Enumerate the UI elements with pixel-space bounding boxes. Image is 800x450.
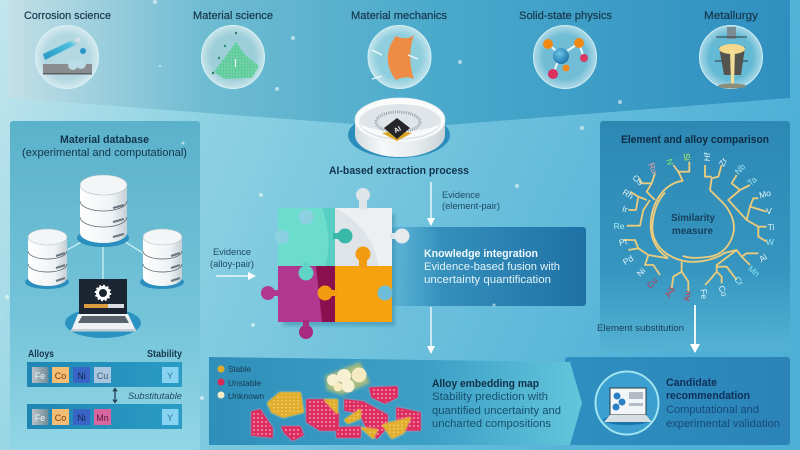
text: alloy embedding map: Stability prediction with [432,391,548,403]
puzzle piece: teal [275,208,352,266]
label: evidence element-pair [442,190,500,211]
discipline: corrosion science [24,10,111,88]
discipline: corrosion science: Corrosion science [24,10,111,22]
alloy row 1: Co [55,371,66,381]
text: candidate recommendation: Candidate [666,377,717,389]
element labels: Pd [621,253,635,267]
label: element substitution: Element substitution [597,323,684,334]
text: candidate recommendation: Computational and [666,404,759,416]
text: alloy embedding map: uncharted compositions [432,418,552,430]
legend: Unknown [228,391,264,401]
label: evidence element-pair: Evidence [442,190,480,200]
element labels: N [664,158,676,166]
element labels: Cu [645,275,659,290]
element labels: Si [682,153,692,161]
heading: element and alloy comparison: Element and alloy comparison [621,134,769,146]
center label: similarity measure: Similarity [671,212,715,224]
icon: petri dish with AI chip [348,98,450,158]
text: alloy embedding map: quantified uncertainty and [432,405,561,417]
arrow: evidence element-pair [427,182,435,226]
element labels: Ru [646,161,660,175]
panel: knowledge integration: uncertainty quantification [424,274,551,286]
element labels: Os [631,173,645,187]
icon: laptop with gear [65,279,141,338]
alloy row 2 [27,404,182,429]
alloy row 1: Fe [35,371,45,381]
icon: central database [77,175,129,247]
puzzle shadow [283,214,395,326]
substitutable marker [113,388,182,402]
panel: knowledge integration [380,227,586,306]
puzzle piece: magenta [261,262,335,339]
element labels: Ta [745,174,759,188]
element labels: Mo [758,188,772,200]
discipline: material mechanics: Material mechanics [351,10,447,22]
discipline: solid-state physics: Solid-state physics [519,10,612,22]
puzzle graphic [261,188,410,339]
alloy row 2: Fe [35,413,45,423]
dendrogram branches [623,162,767,292]
element labels: Mn [746,263,762,279]
element labels: Al [757,252,769,264]
element labels: Pt [618,236,629,248]
alloy row 2: Mn [96,413,109,423]
cluster: unknown [325,362,370,395]
element labels: Ni [635,266,647,278]
element labels: Ti [768,222,774,232]
icon: petri dish with AI chip: AI [393,125,403,135]
label: evidence element-pair: (element-pair) [442,201,500,211]
element labels: Zr [717,156,729,168]
connector lines [67,240,143,280]
alloy row 1: Cu [97,371,108,381]
text: alloy embedding map: Alloy embedding map [432,378,539,390]
element labels: Re [614,221,625,231]
label: evidence alloy-pair: (alloy-pair) [210,259,254,269]
text: candidate recommendation: recommendation [666,390,750,402]
clusters: stable [268,393,410,438]
arrow: evidence alloy-pair [216,272,256,280]
panel: element and alloy comparison [600,121,790,351]
element labels: Ir [621,203,629,215]
icon: left database [25,229,69,289]
discipline: material science: Material science [193,10,273,22]
chart: circular similarity dendrogram [614,152,774,302]
discipline: metallurgy: Metallurgy [704,10,759,22]
alloy row 2: Co [55,413,66,423]
arrow: knowledge to embedding map [427,307,435,354]
element labels: V [766,206,772,216]
top band: disciplines [8,0,790,125]
alloy row 1: Y [167,371,173,381]
center label: similarity measure [671,212,715,237]
alloy row 1 [27,362,182,387]
element labels: Cr [732,274,746,288]
panel: knowledge integration: Knowledge integration [424,248,538,260]
element labels: Nb [733,161,747,176]
table: alloys and stability: Alloys [28,349,54,360]
icon: right database [140,229,184,289]
label: evidence alloy-pair: Evidence [213,247,251,257]
legend: Stable [228,364,251,374]
text: alloy embedding map [432,378,561,430]
heading: material database: Material database [60,134,149,146]
panel: alloy embedding map [209,357,582,445]
text: candidate recommendation: experimental validation [666,418,780,430]
element labels: Ag [663,285,676,299]
chart: embedding clusters [252,362,420,440]
text: candidate recommendation [666,377,780,430]
clusters: unstable [252,387,420,440]
discipline: metallurgy [700,10,762,88]
table: alloys and stability: Stability [147,349,182,360]
legend: Unstable [228,378,261,388]
element labels [614,152,774,302]
arrow: element substitution [690,305,700,353]
substitutable marker: Substitutable [128,391,182,401]
alloy row 2: Ni [77,413,86,423]
heading: AI-based extraction process: AI-based extraction process [329,165,469,177]
panel: knowledge integration: Evidence-based fusion with [424,261,560,273]
icon: laptop in circle [596,372,658,434]
element labels: Hf [702,152,712,162]
table: alloys and stability [27,349,182,429]
panel: material database [10,121,200,450]
heading: material database [22,134,187,159]
puzzle piece: orange [318,246,392,322]
element labels: Co [716,284,730,298]
element labels: Rh [621,187,635,201]
discipline: material mechanics [351,10,447,88]
decorative sparkles [5,0,622,400]
legend [218,364,264,401]
alloy row 1: Ni [77,371,86,381]
element labels: Fe [699,289,709,300]
puzzle piece: silver [335,188,410,266]
heading: material database: (experimental and computational) [22,147,187,159]
panel: candidate recommendation [565,357,790,445]
discipline: solid-state physics [519,10,612,88]
discipline: material science [193,10,273,88]
center label: similarity measure: measure [672,225,713,237]
label: evidence alloy-pair [210,247,254,269]
element labels: Au [682,290,692,302]
alloy row 2: Y [167,413,173,423]
element labels: W [766,237,774,247]
